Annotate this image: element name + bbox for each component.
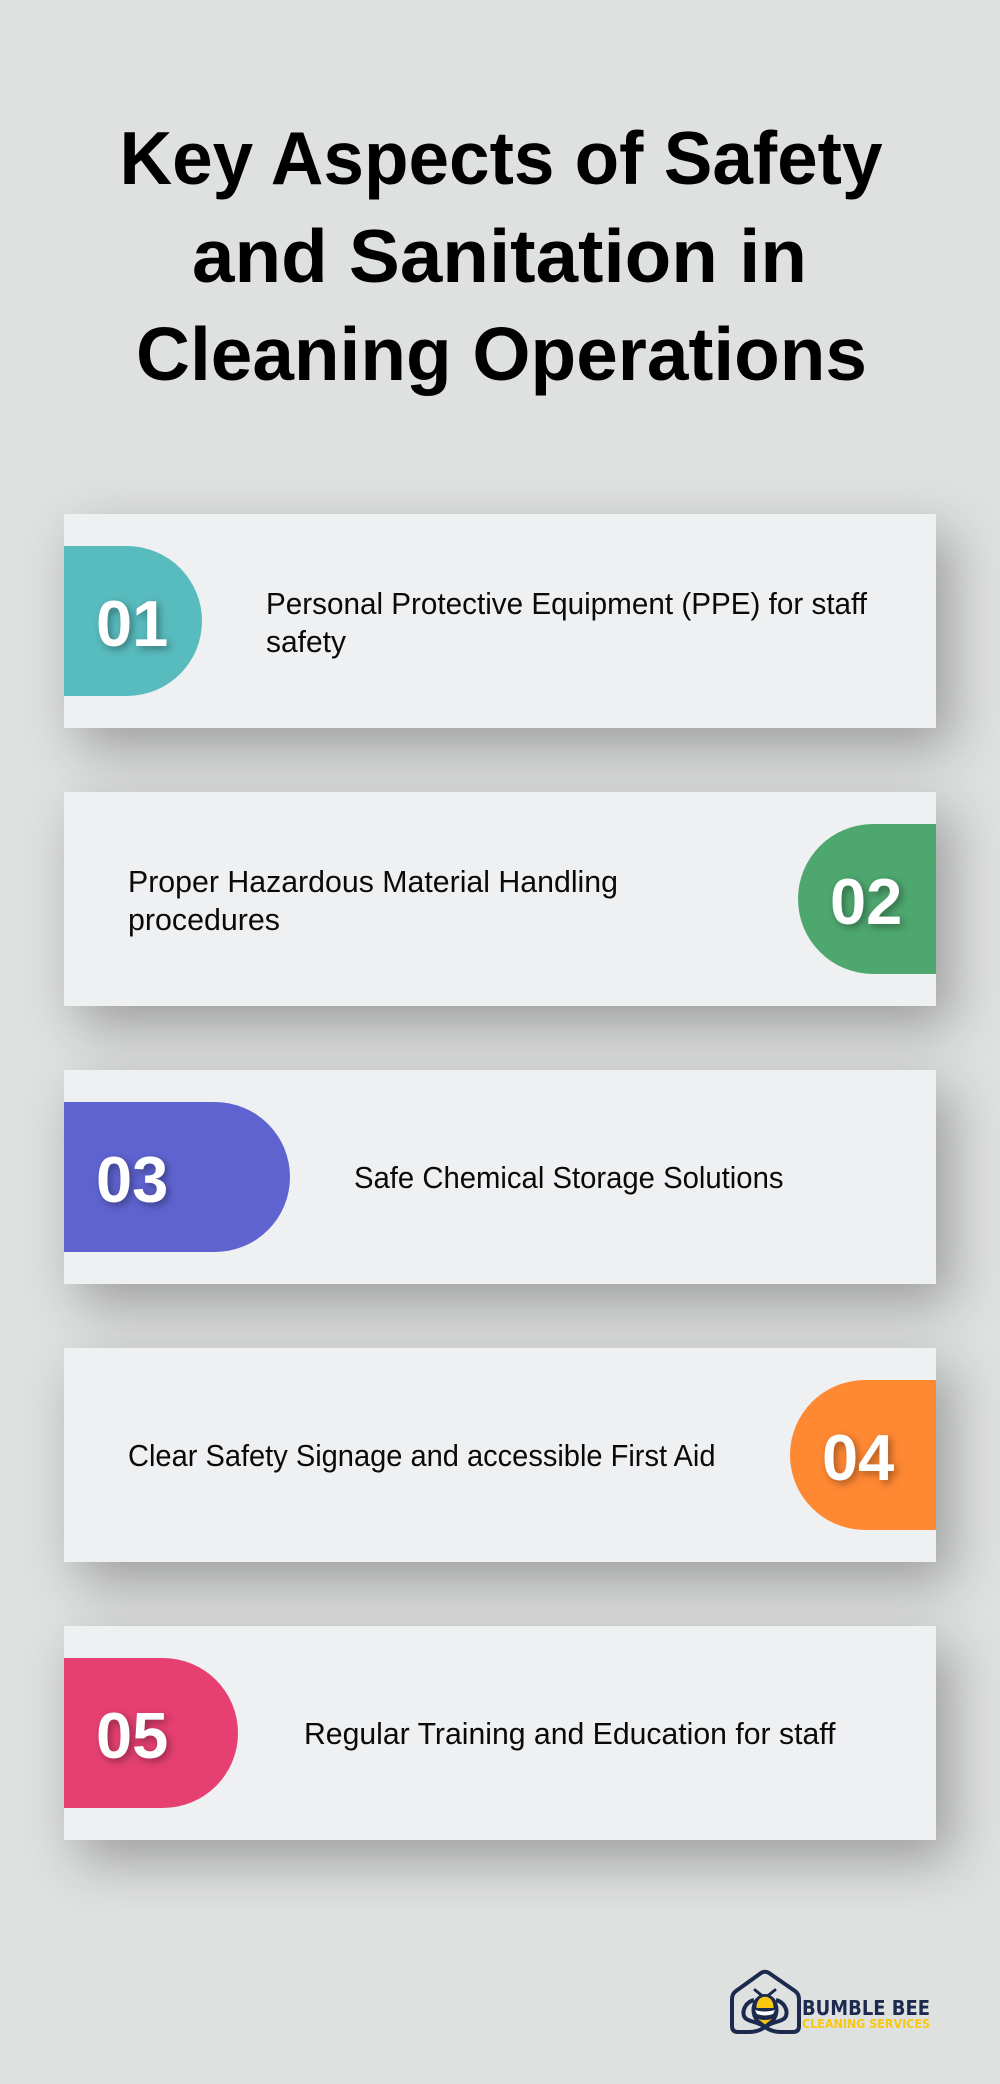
badge: 03: 03 xyxy=(96,1143,168,1216)
panel: item 04 xyxy=(64,1348,936,1562)
panel: item 05 xyxy=(64,1626,936,1840)
title xyxy=(120,116,883,396)
text: item 05: Regular Training and Education for staff xyxy=(304,1717,836,1751)
badge: 02 xyxy=(798,824,936,974)
badge: 01 xyxy=(64,546,202,696)
badge: 04 xyxy=(790,1380,936,1530)
logo: Bumble Bee Cleaning Services xyxy=(730,1970,930,2034)
text: item 01: Personal Protective Equipment (PPE) for staff xyxy=(266,587,867,621)
text: item 03: Safe Chemical Storage Solutions xyxy=(354,1161,784,1195)
badge: 05: 05 xyxy=(96,1699,168,1772)
logo wordmark xyxy=(802,1996,930,2031)
title: Cleaning Operations xyxy=(136,312,867,396)
icon: house with bee xyxy=(732,1972,799,2032)
title: Key Aspects of Safety xyxy=(120,116,883,200)
panel: item 02 xyxy=(64,792,936,1006)
text: item 02: procedures xyxy=(128,903,280,937)
badge: 02: 02 xyxy=(830,865,902,938)
text: item 02: Proper Hazardous Material Handling xyxy=(128,865,618,899)
text: item 01 xyxy=(266,587,868,659)
panel: item 01 xyxy=(64,514,936,728)
title: and Sanitation in xyxy=(192,214,807,298)
text: item 04: Clear Safety Signage and accessible First Aid xyxy=(128,1439,716,1473)
badge: 05 xyxy=(64,1658,238,1808)
text: item 02 xyxy=(128,865,618,937)
text: item 01: safety xyxy=(266,625,347,659)
badge: 01: 01 xyxy=(96,587,168,660)
panel: item 03 xyxy=(64,1070,936,1284)
badge: 04: 04 xyxy=(822,1421,894,1494)
badge: 03 xyxy=(64,1102,290,1252)
